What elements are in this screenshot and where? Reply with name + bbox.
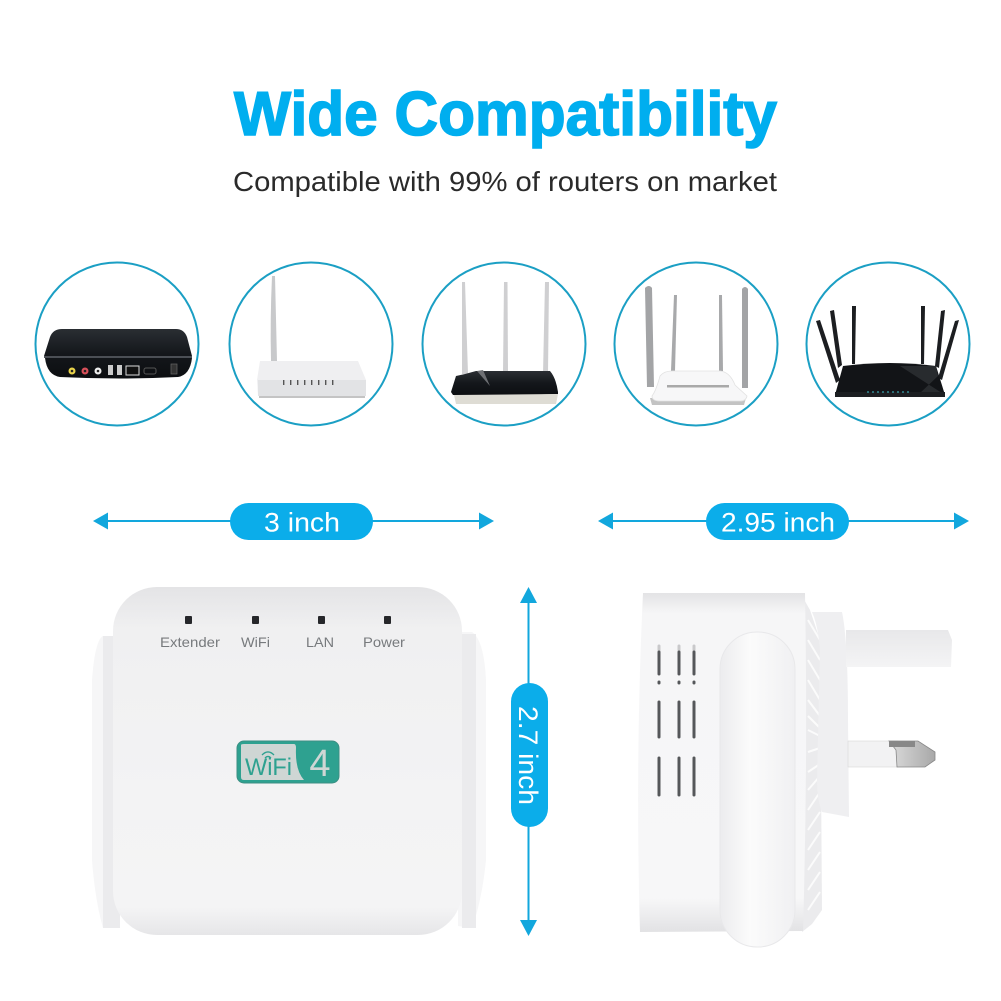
badge: WiFi 4: 4 <box>309 743 331 785</box>
plug plate <box>812 612 849 817</box>
top plug pin <box>846 630 952 667</box>
lower plug pin <box>848 741 935 767</box>
icon: black media box <box>44 329 192 378</box>
dimension arrow: 2.7 inch height: 2.7 inch <box>513 706 543 805</box>
dimension arrow: 2.7 inch height <box>511 587 548 936</box>
status LEDs <box>185 616 391 624</box>
dimension arrow: 2.95 inch depth: 2.95 inch <box>721 508 835 538</box>
LED labels <box>160 634 405 650</box>
dimension arrow: 3 inch width <box>93 503 494 540</box>
subtitle: Compatible with 99% of routers on market <box>233 166 777 197</box>
panel: four antenna white router circle <box>614 262 778 426</box>
LED labels: LAN <box>306 634 334 650</box>
antennas <box>92 632 486 928</box>
panel: three antenna router circle <box>422 262 586 426</box>
dimension arrow: 3 inch width: 3 inch <box>264 508 340 538</box>
dimension arrow: 2.95 inch depth <box>598 503 969 540</box>
title: Wide Compatibility <box>234 80 777 149</box>
LED labels: Power <box>363 634 405 650</box>
badge: WiFi 4 <box>237 741 339 785</box>
antenna <box>720 632 795 947</box>
panel: set-top box circle <box>36 262 198 426</box>
device: extender side view <box>638 593 952 947</box>
LED labels: WiFi <box>241 634 270 650</box>
icon: black router three antennas <box>451 282 558 404</box>
panel: six antenna black router circle <box>806 262 970 426</box>
LED labels: Extender <box>160 634 220 650</box>
icon: white router single antenna <box>257 276 366 398</box>
panel: single antenna router circle <box>230 262 392 426</box>
vents <box>659 646 694 795</box>
body <box>113 587 462 935</box>
icon: black router six antennas <box>816 306 959 397</box>
ribbed back <box>802 596 822 932</box>
badge: WiFi 4: WiFi <box>245 754 292 781</box>
body <box>638 593 806 932</box>
icon: white router four antennas <box>645 286 748 405</box>
device: extender front view <box>92 587 486 935</box>
